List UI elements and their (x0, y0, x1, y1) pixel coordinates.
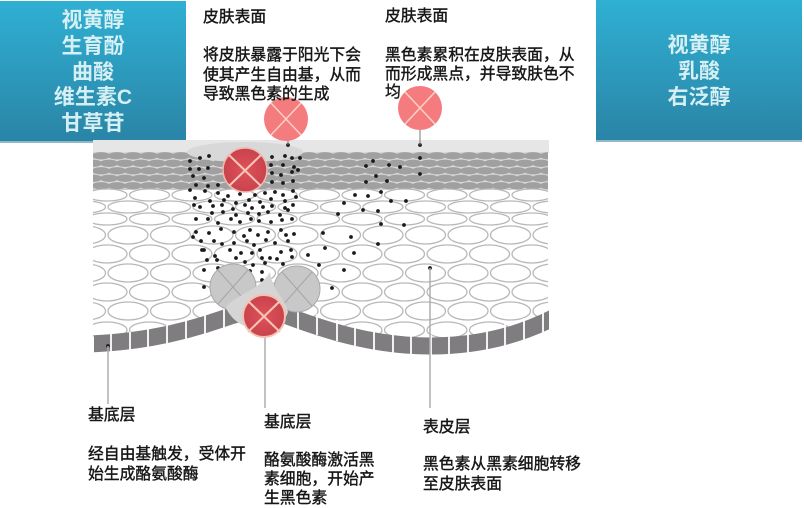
gray skin surface layer (93, 152, 548, 190)
panel: right ingredients: 乳酸 (678, 60, 720, 83)
panel: left ingredients: 曲酸 (72, 61, 114, 84)
text: skin surface right (385, 7, 575, 101)
panel: left ingredients: 生育酚 (62, 34, 124, 58)
text: basal layer middle: 素细胞，开始产 (264, 470, 375, 488)
text: epidermis: 表皮层 (423, 418, 470, 436)
gray dome above plume (187, 142, 303, 162)
icon: red inhibited circle on basal layer (243, 295, 285, 337)
text: skin surface right: 黑色素累积在皮肤表面，从 (385, 46, 575, 64)
basal layer segments (90, 308, 555, 357)
skin cross-section diagram (93, 86, 549, 408)
melanocyte body (226, 272, 288, 329)
panel: left ingredients: 视黄醇 (62, 9, 124, 32)
text: basal layer middle: 生黑色素 (264, 489, 327, 507)
white area under the basal layer (90, 317, 552, 372)
gray melanocyte cell 2 (274, 266, 320, 312)
text: basal layer left: 经自由基触发，受体开 (88, 445, 246, 463)
text: epidermis (423, 418, 581, 493)
text: basal layer left (88, 406, 246, 483)
icon: red inhibited circle top left (264, 97, 308, 141)
text: skin surface left: 导致黑色素的生成 (203, 85, 330, 103)
text: epidermis: 至皮肤表面 (423, 475, 502, 493)
gray melanocyte cell 1 (210, 264, 256, 310)
panel: left ingredients: 甘草苷 (62, 112, 124, 135)
leader lines to upper circles (288, 110, 420, 145)
white epidermis cells (93, 188, 548, 338)
text: basal layer left: 始生成酪氨酸酶 (88, 465, 199, 483)
icon: red inhibited circle top right (398, 86, 442, 130)
text: basal layer left: 基底层 (88, 406, 135, 424)
melanin dots (108, 145, 430, 346)
text: skin surface right: 均 (385, 83, 401, 101)
text: skin surface left (203, 8, 361, 103)
text: skin surface right: 而形成黑点，并导致肤色不 (385, 65, 575, 83)
text: skin surface left: 将皮肤暴露于阳光下会 (203, 46, 361, 64)
text: skin surface left: 使其产生自由基，从而 (203, 66, 361, 84)
text: epidermis: 黑色素从黑素细胞转移 (423, 455, 581, 473)
panel: right ingredients: 右泛醇 (668, 86, 730, 109)
text: basal layer middle: 酪氨酸酶激活黑 (264, 451, 375, 469)
stratum corneum band (93, 140, 549, 153)
text: basal layer middle (264, 413, 375, 507)
text: skin surface right: 皮肤表面 (385, 7, 448, 25)
panel: right ingredients (596, 0, 802, 142)
text: skin surface left: 皮肤表面 (203, 8, 266, 26)
panel: right ingredients: 视黄醇 (668, 34, 730, 57)
icon: red inhibited circle on surface (223, 148, 267, 192)
text: basal layer middle: 基底层 (264, 413, 311, 431)
leader lines (108, 268, 430, 408)
panel: left ingredients: 维生素C (54, 86, 132, 109)
panel: left ingredients (0, 1, 186, 143)
